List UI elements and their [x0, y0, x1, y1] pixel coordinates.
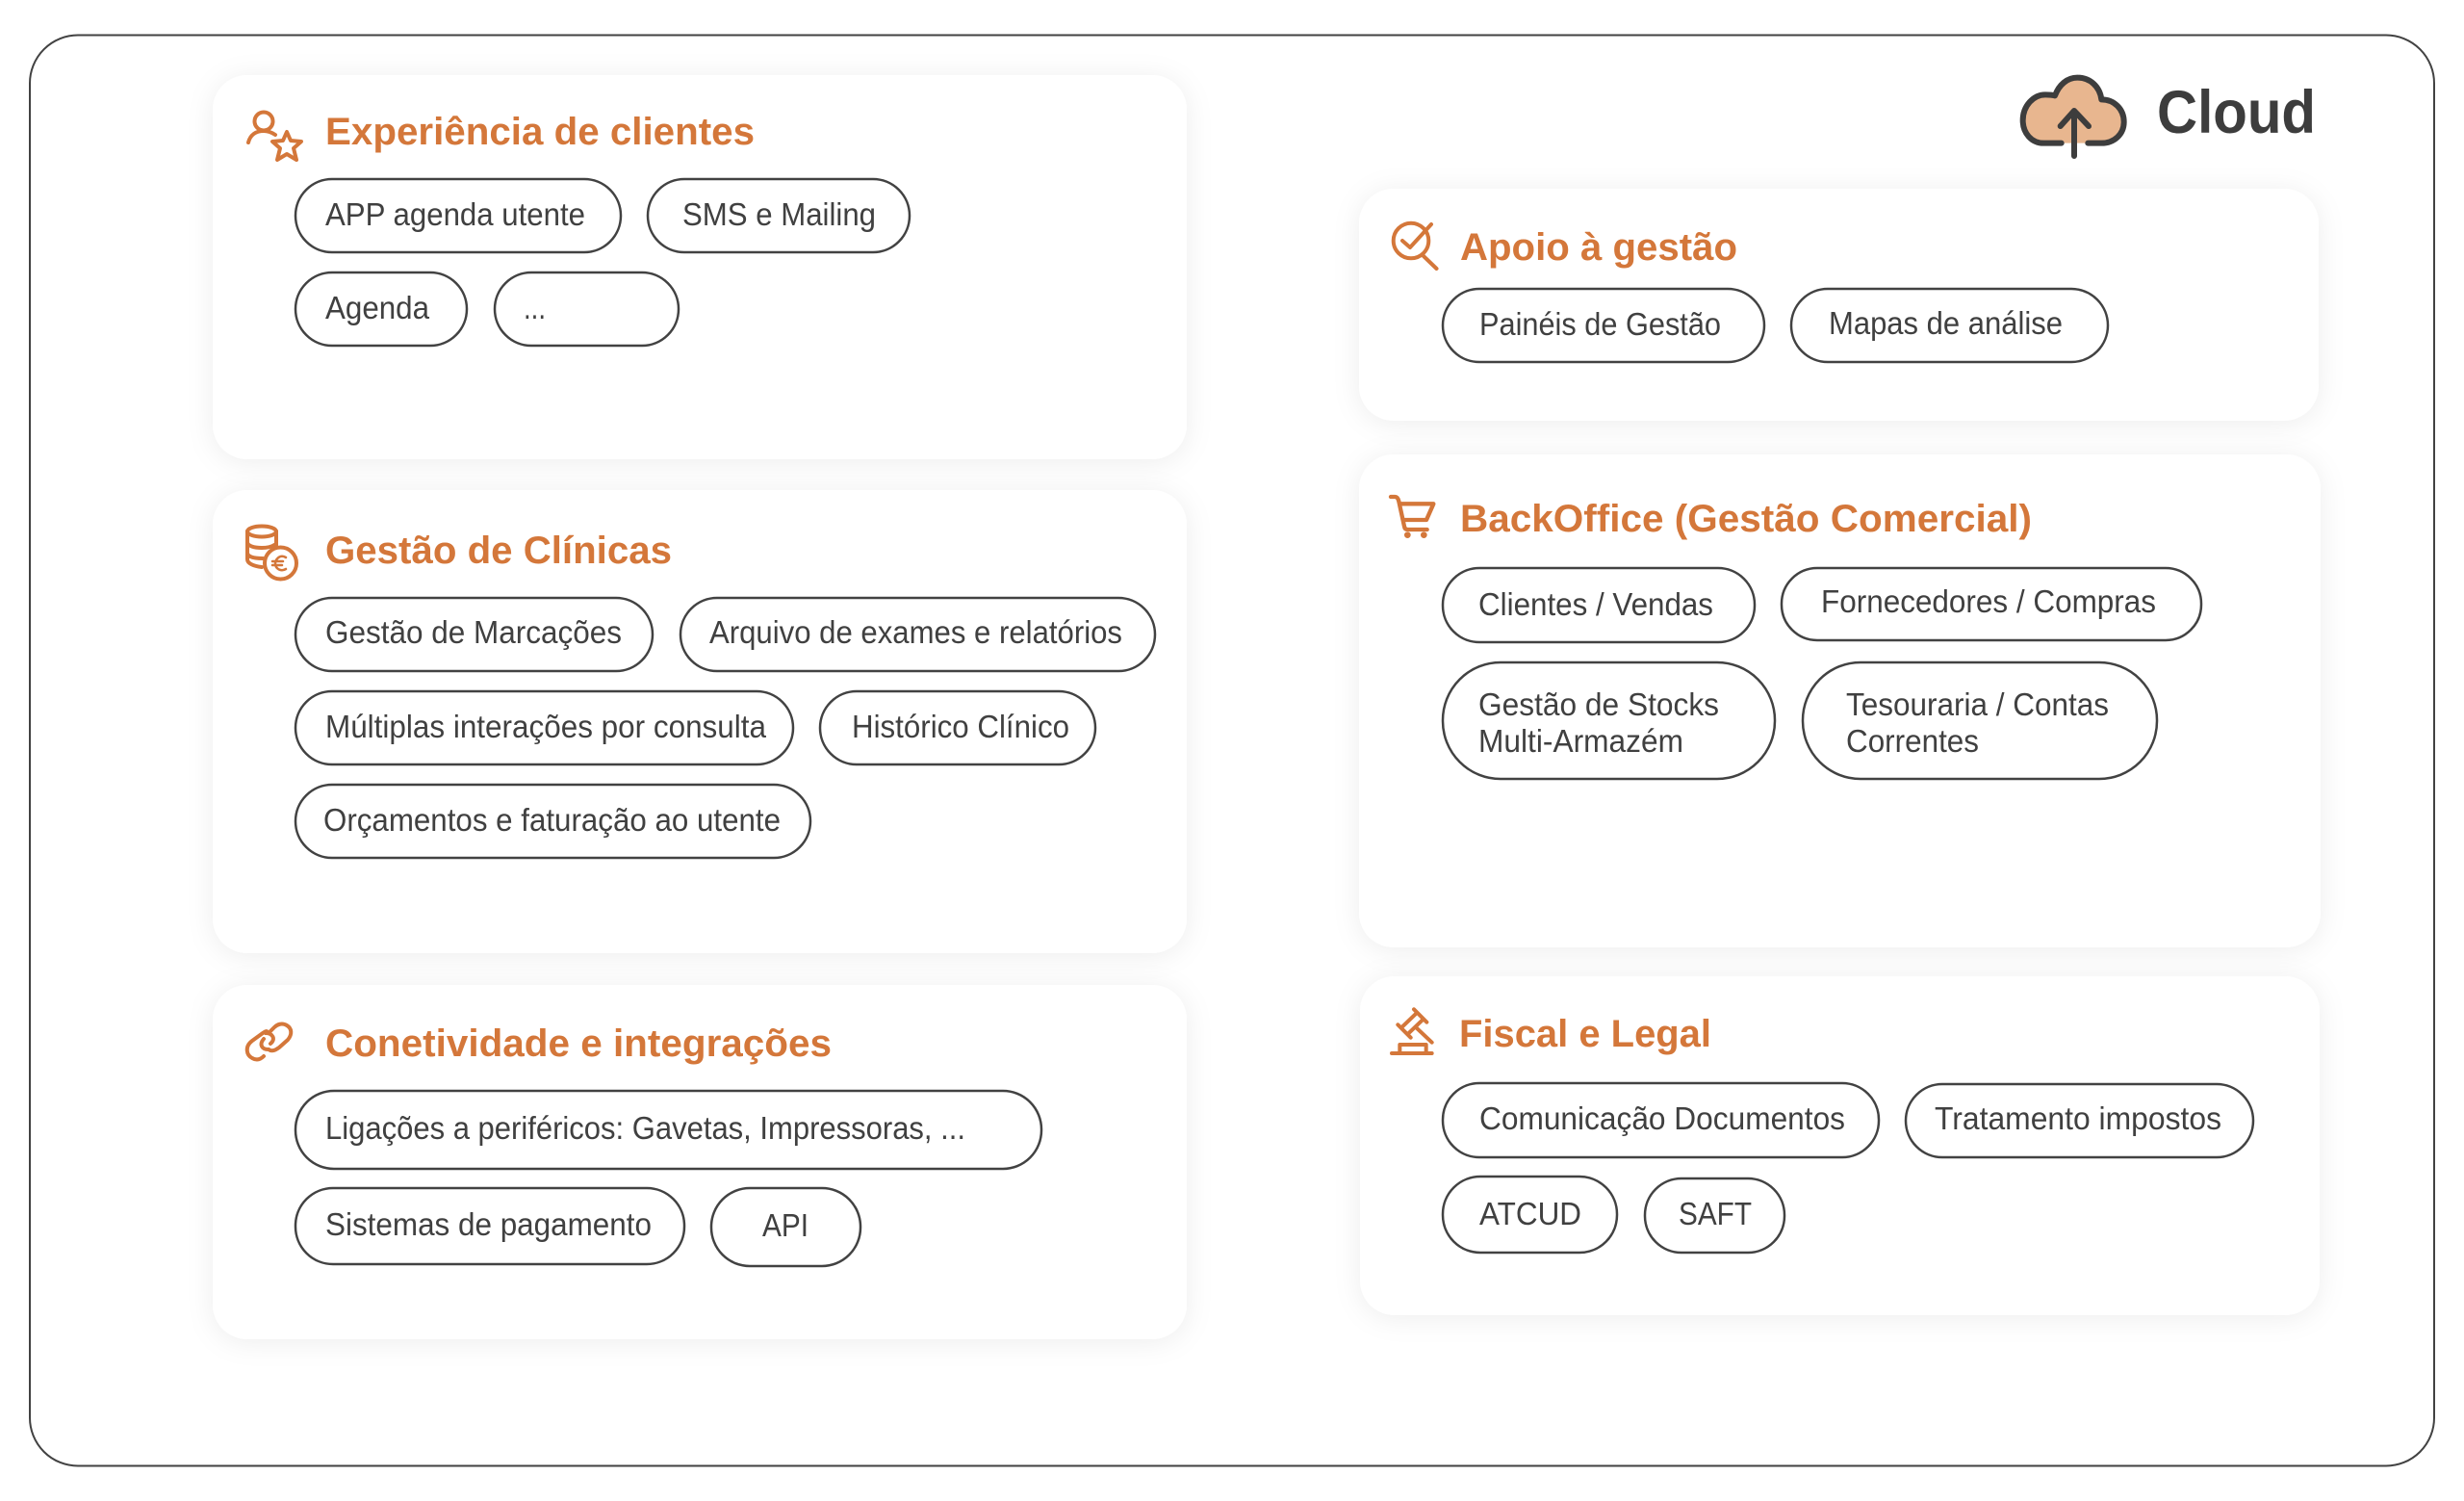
heading: Experiência de clientes: [325, 111, 755, 153]
icon: user with star: [248, 112, 301, 160]
icon: cloud upload: [2023, 78, 2124, 156]
pill: Orçamentos e faturação ao utente: Orçamentos e faturação ao utente: [323, 802, 781, 838]
pill: Tratamento impostos: [1906, 1084, 2253, 1157]
pill: ATCUD: [1443, 1177, 1617, 1253]
pill: SAFT: [1645, 1178, 1784, 1253]
pill: SMS e Mailing: SMS e Mailing: [682, 196, 876, 232]
pill: Mapas de análise: Mapas de análise: [1829, 305, 2063, 341]
pill: Painéis de Gestão: Painéis de Gestão: [1479, 306, 1721, 342]
icon: gavel: [1392, 1009, 1432, 1053]
panel: Gestão de Clínicas: [213, 490, 1187, 953]
pill: Gestão de Stocks Multi-Armazém: Gestão de Stocks: [1478, 686, 1719, 722]
pill: Gestão de Marcações: Gestão de Marcações: [325, 614, 622, 650]
pill: Painéis de Gestão: [1443, 289, 1764, 362]
heading: Fiscal e Legal: [1459, 1013, 1711, 1055]
cloud header: [2023, 78, 2316, 156]
pill: Arquivo de exames e relatórios: [680, 598, 1155, 671]
icon: magnifier with check: [1394, 223, 1436, 269]
pill: API: [711, 1188, 860, 1266]
pill: APP agenda utente: APP agenda utente: [325, 196, 585, 232]
pill: Gestão de Marcações: [295, 598, 653, 671]
pill: Orçamentos e faturação ao utente: [295, 785, 810, 858]
pill: Sistemas de pagamento: [295, 1188, 684, 1264]
pill: Gestão de Stocks Multi-Armazém: [1443, 662, 1775, 779]
heading: Cloud: Cloud: [2157, 79, 2316, 146]
pill: Clientes / Vendas: [1443, 568, 1755, 642]
icon: chain link: [247, 1024, 291, 1059]
pill: API: API: [762, 1207, 808, 1243]
heading: BackOffice (Gestão Comercial): [1460, 498, 2032, 540]
heading: Conetividade e integrações: [325, 1022, 832, 1065]
panel: Apoio à gestão: [1359, 189, 2319, 421]
pill: Agenda: Agenda: [325, 290, 430, 325]
pill: Agenda: [295, 272, 467, 346]
pill: Arquivo de exames e relatórios: Arquivo de exames e relatórios: [709, 614, 1122, 650]
icon: shopping cart: [1391, 497, 1433, 538]
icon: coins with euro: [247, 526, 296, 580]
pill: Gestão de Stocks Multi-Armazém: Multi-Armazém: [1478, 723, 1683, 759]
pill: ...: ...: [524, 290, 546, 325]
pill: Histórico Clínico: Histórico Clínico: [852, 709, 1069, 744]
pill: Histórico Clínico: [820, 691, 1095, 764]
pill: Fornecedores / Compras: Fornecedores / Compras: [1821, 583, 2156, 619]
panel: Conetividade e integrações: [213, 985, 1187, 1339]
panel: BackOffice (Gestão Comercial): [1359, 454, 2321, 947]
pill: Clientes / Vendas: Clientes / Vendas: [1478, 586, 1713, 622]
pill: Tesouraria / Contas Correntes: Tesouraria / Contas: [1846, 686, 2109, 722]
pill: SMS e Mailing: [648, 179, 910, 252]
pill: Múltiplas interações por consulta: Múltiplas interações por consulta: [325, 709, 767, 744]
panel: Fiscal e Legal: [1360, 976, 2320, 1315]
pill: Comunicação Documentos: Comunicação Documentos: [1479, 1100, 1845, 1136]
heading: Gestão de Clínicas: [325, 530, 672, 572]
pill: Mapas de análise: [1791, 289, 2108, 362]
pill: Comunicação Documentos: [1443, 1083, 1879, 1157]
pill: Ligações a periféricos: [295, 1091, 1041, 1169]
pill: Sistemas de pagamento: Sistemas de pagamento: [325, 1206, 652, 1242]
pill: Ligações a periféricos: Ligações a periféricos: Gavetas, Impressoras, ...: [325, 1110, 965, 1146]
pill: ...: [495, 272, 679, 346]
pill: Fornecedores / Compras: [1782, 568, 2201, 640]
heading: Apoio à gestão: [1460, 226, 1737, 269]
pill: Tesouraria / Contas Correntes: Correntes: [1846, 723, 1979, 759]
pill: SAFT: SAFT: [1679, 1196, 1752, 1231]
pill: APP agenda utente: [295, 179, 621, 252]
pill: Tratamento impostos: Tratamento impostos: [1935, 1100, 2221, 1136]
panel: Experiência de clientes: [213, 75, 1187, 459]
pill: Tesouraria / Contas Correntes: [1803, 662, 2157, 779]
pill: ATCUD: ATCUD: [1479, 1196, 1581, 1231]
pill: Múltiplas interações por consulta: [295, 691, 793, 764]
